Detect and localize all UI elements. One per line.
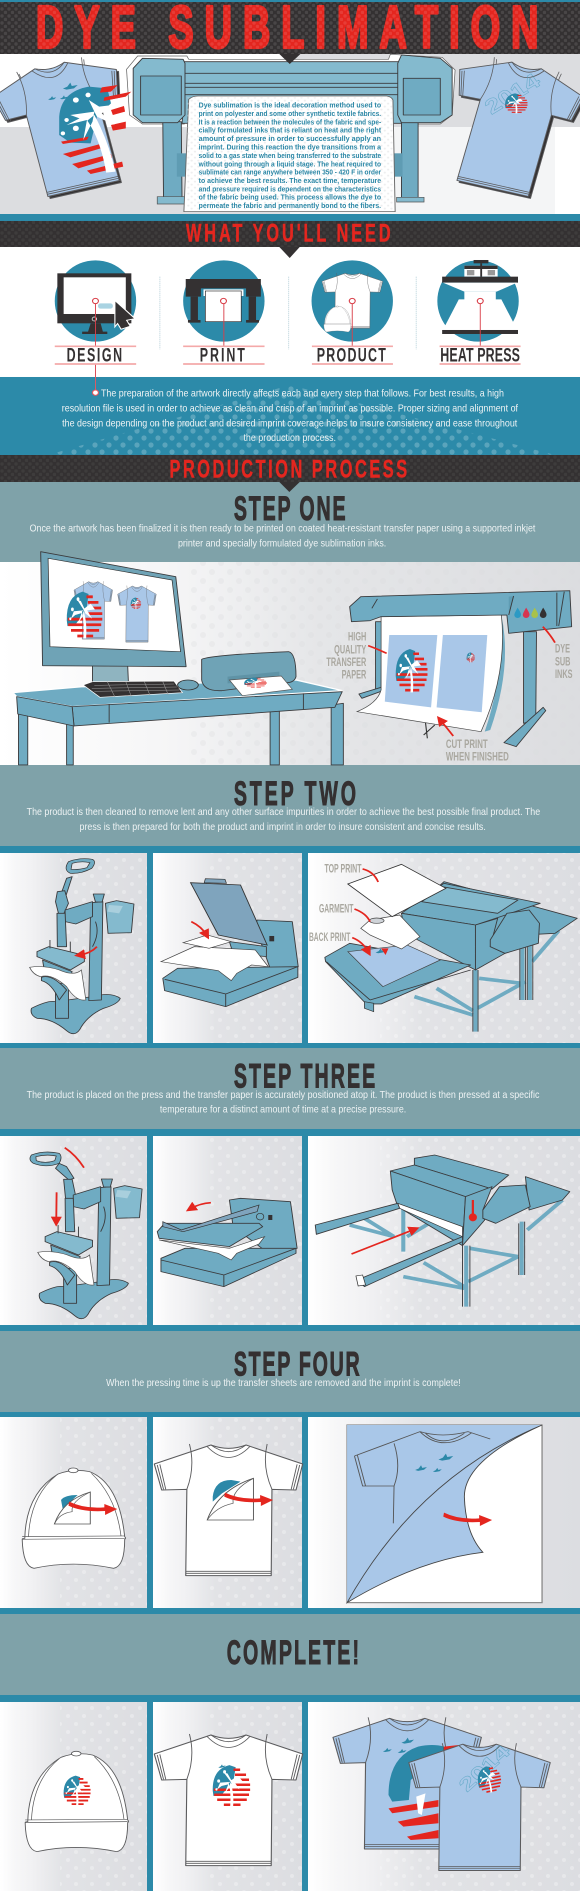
paper with description: amount of pressure in order to successfully apply an: [199, 134, 381, 143]
finished blue tees: [333, 1717, 550, 1871]
label: dye sub inks: SUB: [555, 656, 570, 669]
cap press: [30, 859, 134, 1034]
preparation paragraph: The preparation of the artwork directly affects each and every step that follows. For best results, a high: [101, 389, 504, 399]
desk: [13, 680, 343, 765]
label: cut print when finished: WHEN FINISHED: [446, 750, 509, 763]
step three text: [27, 1090, 539, 1115]
hat with peeled transfer: [22, 1468, 126, 1568]
label: cut print when finished: [446, 738, 509, 763]
panel row: complete: [0, 1695, 580, 1891]
connector lines and rings: [92, 298, 483, 390]
panel row: step three: [0, 1129, 580, 1331]
step two text: [27, 807, 540, 833]
small desktop printer: [202, 652, 296, 696]
preparation paragraph: the production process.: [243, 433, 336, 444]
step four text: When the pressing time is up the transfer sheets are removed and the imprint is complete!: [106, 1378, 461, 1389]
back blue tee: [333, 1717, 481, 1849]
tunnel press with sheets: [309, 862, 577, 1032]
paper with description: Dye sublimation is the ideal decoration method used to: [199, 101, 381, 110]
step one text: [30, 524, 536, 549]
paper with description: print on polyester and some other synthetic textile fabrics.: [199, 109, 381, 118]
panel: artwork preparation text: [0, 377, 580, 455]
finished white tee: [154, 1734, 303, 1866]
back t-shirt: [431, 51, 580, 204]
finished hat: [25, 1751, 129, 1852]
panel row: step two: [0, 846, 580, 1048]
tunnel press loading: [315, 1155, 570, 1307]
icon: heat press: [437, 260, 519, 342]
label: dye sub inks: [555, 643, 573, 682]
large format printer: [350, 591, 572, 747]
heading: PRODUCTION PROCESS: [170, 456, 407, 483]
label: heat press: HEAT PRESS: [440, 345, 520, 366]
label: design: DESIGN: [67, 345, 122, 366]
header panel: dye sublimation intro: [0, 0, 580, 214]
teal stripe: [0, 214, 580, 221]
paper with description: sublimate can range anywhere between 350 - 420 F in order: [199, 168, 381, 177]
large format printer illustration: [127, 54, 455, 212]
sheet labels: TOP PRINT: [324, 862, 362, 875]
title band: [0, 0, 580, 61]
paper with description: and pressure required is dependent on the characteristics: [199, 185, 381, 193]
label rules: [55, 346, 521, 364]
step three band: [27, 1057, 539, 1115]
step four title: STEP FOUR: [234, 1345, 360, 1383]
front blue tee: [409, 1741, 550, 1871]
label: high quality transfer paper: HIGH: [348, 631, 366, 644]
halftone triangle: [48, 385, 555, 455]
step three title: STEP THREE: [234, 1057, 375, 1095]
label: high quality transfer paper: PAPER: [342, 669, 366, 682]
front t-shirt: [0, 51, 148, 204]
step two title: STEP TWO: [234, 774, 356, 812]
icon: design: [55, 260, 136, 342]
paper with description: permeate the fabric and permanently bond to the fibers.: [199, 201, 381, 210]
clamshell press closed: [157, 1198, 297, 1287]
paper with description: cially formulated inks that is reliant on heat and the right: [199, 126, 381, 135]
label: product: PRODUCT: [317, 345, 386, 366]
label: print: PRINT: [200, 345, 245, 366]
step two band: [27, 774, 540, 833]
sheet labels: [309, 862, 362, 944]
preparation paragraph: [62, 377, 518, 444]
section band: what you'll need: [0, 220, 580, 247]
transfer sheets: [385, 635, 437, 707]
section band: production process: [0, 455, 580, 483]
desktop monitor: [41, 552, 186, 683]
step one text: printer and specially formulated dye sublimation inks.: [178, 539, 386, 549]
step four band: [106, 1345, 461, 1389]
label: high quality transfer paper: QUALITY: [334, 644, 367, 657]
step one band: [0, 482, 580, 562]
panel: step one illustration: [0, 552, 580, 765]
clamshell press open: [161, 879, 298, 1007]
paper with description: It is a reaction between the molecules of the fabric and spe-: [199, 118, 381, 126]
label: cut print when finished: CUT PRINT: [446, 738, 488, 751]
paper with description: of the fabric being used. This process allows the dye to: [199, 193, 381, 202]
panel: what you'll need icons: [0, 247, 580, 390]
heading: WHAT YOU'LL NEED: [186, 220, 391, 247]
paper with description: without going through a liquid stage. The heat required to: [198, 160, 381, 168]
label: dye sub inks: DYE: [555, 643, 570, 656]
step two text: press is then prepared for both the product and imprint in order to insure consistent and concise results.: [80, 822, 486, 833]
label: high quality transfer paper: TRANSFER: [326, 656, 366, 670]
label: high quality transfer paper: [326, 631, 367, 682]
paper with description: to achieve the best results. The exact time, temperature: [199, 176, 382, 185]
icon: print: [183, 260, 265, 342]
peeled transfer sheet: [347, 1425, 542, 1603]
cap press closing: [30, 1148, 142, 1319]
complete title: COMPLETE!: [227, 1633, 359, 1671]
paper with description: imprint. During this reaction the dye transitions from a: [199, 143, 382, 151]
step one title: STEP ONE: [234, 489, 346, 527]
paper with description: [184, 96, 395, 212]
ink drops: [514, 608, 547, 618]
back t-shirt: 2014: [480, 68, 546, 119]
sheet labels: BACK PRINT: [309, 931, 351, 944]
front blue tee: 2014: [454, 1741, 515, 1796]
keyboard and mouse: [83, 680, 198, 697]
panel row: step four: [0, 1412, 580, 1614]
icon: product: [312, 260, 393, 342]
label: dye sub inks: INKS: [555, 668, 573, 682]
sheet labels: GARMENT: [319, 902, 353, 915]
scissors: [424, 723, 435, 738]
paper with description: solid to a gas state when being transferred to the substrate: [199, 151, 382, 160]
step three text: temperature for a distinct amount of time at a precise pressure.: [160, 1105, 406, 1115]
arrows: [368, 627, 555, 736]
tee with peeled transfer: [154, 1444, 303, 1576]
